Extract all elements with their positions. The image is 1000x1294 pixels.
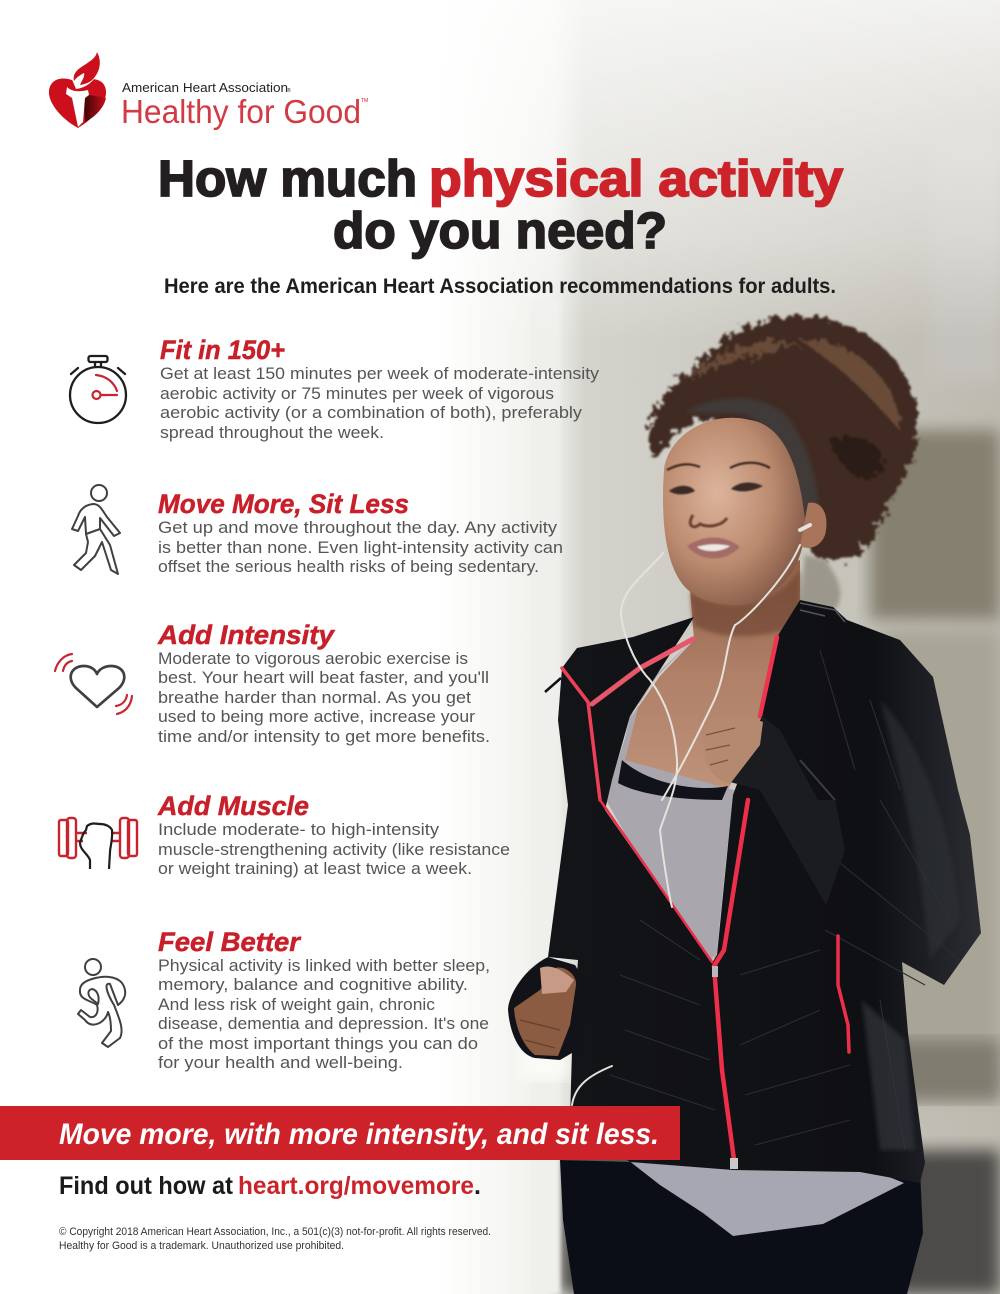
text: feel better: memory, balance and cognitive ability. (158, 975, 468, 994)
call to action: . (474, 1172, 481, 1200)
hood edge (800, 603, 845, 622)
logo text: trademark: TM (361, 98, 368, 104)
text: feel better: of the most important things you can do (158, 1034, 478, 1053)
photo: woman jogging (508, 316, 981, 1294)
title: How much (158, 150, 417, 207)
text: feel better: for your health and well-being. (158, 1053, 403, 1072)
raised hand (702, 717, 763, 784)
pink trim and zipper (562, 637, 849, 1167)
title (158, 150, 844, 259)
heading: add muscle: Add Muscle (157, 791, 309, 821)
facial features (667, 463, 770, 559)
ear (800, 503, 826, 548)
text: add intensity: breathe harder than normal. As you get (158, 688, 471, 707)
heading: fit in 150+: Fit in 150+ (160, 335, 285, 365)
heading: move more, sit less: Move More, Sit Less (158, 489, 409, 519)
heading: feel better: Feel Better (158, 927, 302, 957)
neck shadow (690, 570, 800, 636)
face (663, 418, 805, 605)
heading: add intensity: Add Intensity (157, 620, 336, 650)
call to action: Find out how at (59, 1172, 234, 1200)
text: add intensity: Moderate to vigorous aerobic exercise is (158, 649, 468, 668)
icon: hand holding dumbbell (59, 818, 137, 869)
title: physical activity (429, 150, 844, 207)
icon: running person (78, 959, 125, 1047)
hair (648, 316, 917, 561)
lower shirt hem (628, 1160, 904, 1236)
text: add muscle: muscle-strengthening activity (like resistance (158, 840, 510, 859)
text: add intensity (158, 649, 490, 746)
text: add muscle: Include moderate- to high-intensity (158, 820, 440, 839)
copyright (59, 1226, 491, 1252)
earphone cords (572, 525, 810, 1105)
logo text: American Heart Association: American Heart Association (122, 80, 288, 95)
text: move more, sit less: offset the serious health risks of being sedentary. (158, 557, 539, 576)
text: add muscle (158, 820, 510, 878)
neck and chest (622, 560, 800, 790)
call to action (59, 1172, 481, 1200)
text: feel better (158, 956, 490, 1072)
jacket quilting and sleeve highlights (610, 650, 960, 1150)
text: fit in 150+: spread throughout the week. (160, 423, 384, 442)
text: feel better: disease, dementia and depression. It's one (158, 1014, 489, 1033)
jacket torso (548, 600, 981, 1183)
copyright: Healthy for Good is a trademark. Unauthorized use prohibited. (59, 1240, 344, 1252)
text: fit in 150+: aerobic activity (or a combination of both), preferably (160, 403, 583, 422)
right sleeve over hand (730, 716, 845, 905)
section: fit in 150+ (70, 335, 600, 442)
text: move more, sit less (158, 518, 563, 576)
section: add muscle (59, 791, 510, 878)
logo: heart and torch (49, 52, 106, 128)
text: add intensity: best. Your heart will beat faster, and you'll (158, 668, 489, 687)
drawstring (545, 678, 561, 692)
text: fit in 150+: Get at least 150 minutes per week of moderate-intensity (160, 364, 600, 383)
zipper pulls (712, 966, 718, 977)
icon: stopwatch (70, 356, 126, 423)
logo text: registered mark: ® (287, 87, 291, 94)
inner grey tee upper (610, 638, 735, 963)
text: feel better: And less risk of weight gain, chronic (158, 995, 436, 1014)
text: move more, sit less: is better than none. Even light-intensity activity can (158, 538, 563, 557)
text: feel better: Physical activity is linked with better sleep, (158, 956, 490, 975)
section: move more, sit less (72, 485, 563, 576)
text: add intensity: time and/or intensity to get more benefits. (158, 727, 490, 746)
subtitle: Here are the American Heart Association recommendations for adults. (164, 275, 836, 298)
lower hand and glove (508, 957, 590, 1060)
call to action: heart.org/movemore (238, 1172, 474, 1200)
banner (0, 1106, 680, 1160)
text: fit in 150+: aerobic activity or 75 minutes per week of vigorous (160, 384, 554, 403)
icon: heart with beats (55, 654, 132, 714)
section: feel better (78, 927, 490, 1072)
leggings (560, 1160, 923, 1294)
text: fit in 150+ (160, 364, 600, 442)
copyright: © Copyright 2018 American Heart Association, Inc., a 501(c)(3) not-for-profit. All rights reserved. (59, 1226, 491, 1238)
logo text: Healthy for Good: Healthy for Good (121, 93, 361, 130)
text: add intensity: used to being more active, increase your (158, 707, 475, 726)
section: add intensity (55, 620, 490, 746)
text: move more, sit less: Get up and move throughout the day. Any activity (158, 518, 558, 537)
icon: walking person (72, 485, 120, 574)
title: do you need? (333, 202, 667, 259)
logo (49, 52, 368, 130)
banner: Move more, with more intensity, and sit less. (59, 1118, 659, 1151)
text: add muscle: or weight training) at least twice a week. (158, 859, 472, 878)
